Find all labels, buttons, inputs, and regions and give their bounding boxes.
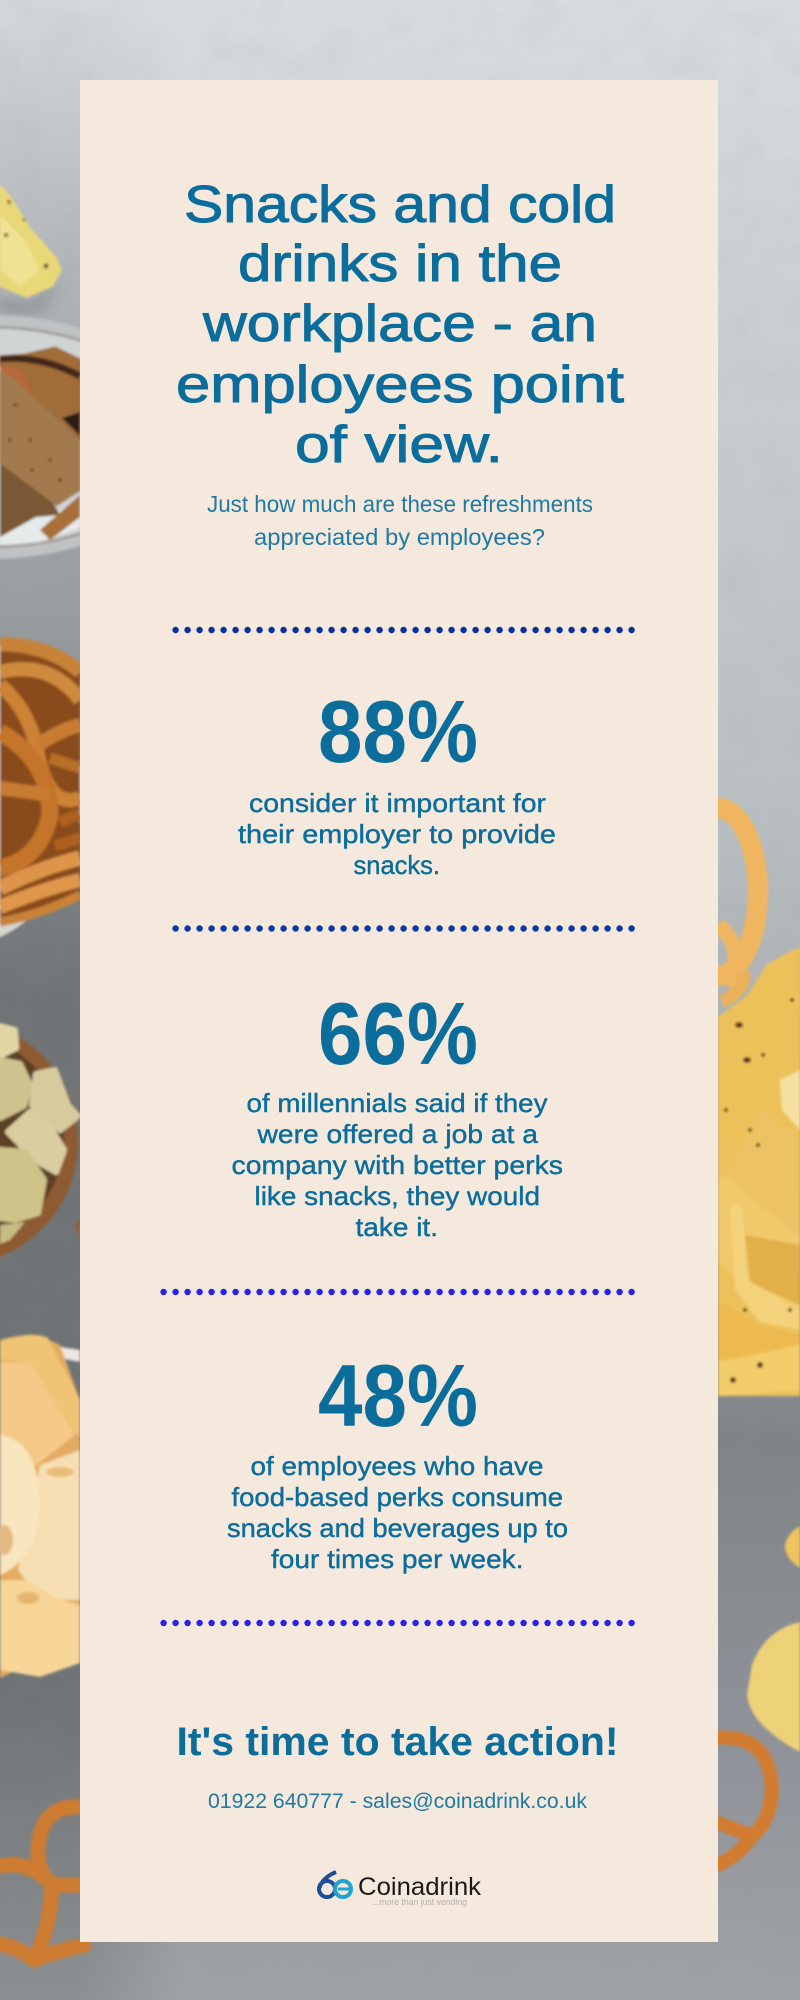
stat description: like snacks, they would	[254, 1181, 540, 1211]
nacho chip, top left	[0, 187, 62, 312]
nacho chips	[718, 948, 800, 1396]
stat: 88%	[238, 682, 556, 880]
title: workplace - an	[202, 295, 597, 353]
subtitle: appreciated by employees?	[254, 524, 545, 550]
potato chip, small	[785, 1526, 800, 1568]
panel: content card	[80, 80, 718, 1942]
stat description: take it.	[356, 1212, 438, 1242]
photo: snacks on the right edge	[678, 808, 800, 1866]
title	[176, 176, 625, 474]
stat description: company with better perks	[232, 1150, 563, 1180]
pretzel, bottom left	[0, 1807, 84, 1960]
stat: 66%	[232, 984, 563, 1242]
photo: snacks on the left edge	[0, 187, 190, 1960]
stat description: were offered a job at a	[256, 1119, 539, 1149]
subtitle: Just how much are these refreshments	[207, 491, 593, 517]
call to action heading: It's time to take action!	[176, 1720, 618, 1764]
stat description: of employees who have	[250, 1451, 544, 1481]
tagline: ...more than just vending	[372, 1897, 467, 1907]
corn ring snack	[678, 808, 758, 1002]
stat number: 88%	[318, 682, 478, 781]
stat: 48%	[227, 1346, 568, 1574]
glass bowl with bread	[0, 315, 190, 559]
bowl of potato puffs and chips	[0, 1335, 80, 1678]
title: of view.	[295, 416, 503, 474]
stat number: 66%	[318, 984, 478, 1083]
stat description: snacks.	[354, 850, 440, 880]
wordmark: Coinadrink	[358, 1873, 482, 1901]
stat description: snacks and beverages up to	[227, 1513, 568, 1543]
stat description	[227, 1451, 568, 1574]
stat number: 48%	[318, 1346, 478, 1445]
title: drinks in the	[238, 235, 562, 293]
title: employees point	[176, 356, 625, 414]
title: Snacks and cold	[184, 176, 616, 234]
stat description	[232, 1088, 563, 1242]
white bowl with pretzels	[0, 637, 83, 947]
logo: Coinadrink	[319, 1872, 482, 1907]
icon: 60 mark	[319, 1872, 352, 1897]
potato chip, large	[747, 1622, 800, 1752]
stat description: consider it important for	[249, 788, 546, 818]
pretzel, right	[716, 1738, 772, 1866]
stat description: of millennials said if they	[246, 1088, 548, 1118]
stat description: four times per week.	[271, 1544, 524, 1574]
wooden bowl with croutons	[0, 1018, 80, 1266]
stat description: food-based perks consume	[232, 1482, 563, 1512]
subtitle	[207, 491, 593, 550]
contact details: 01922 640777 - sales@coinadrink.co.uk	[208, 1790, 587, 1813]
stat description: their employer to provide	[238, 819, 556, 849]
stat description	[238, 788, 556, 880]
